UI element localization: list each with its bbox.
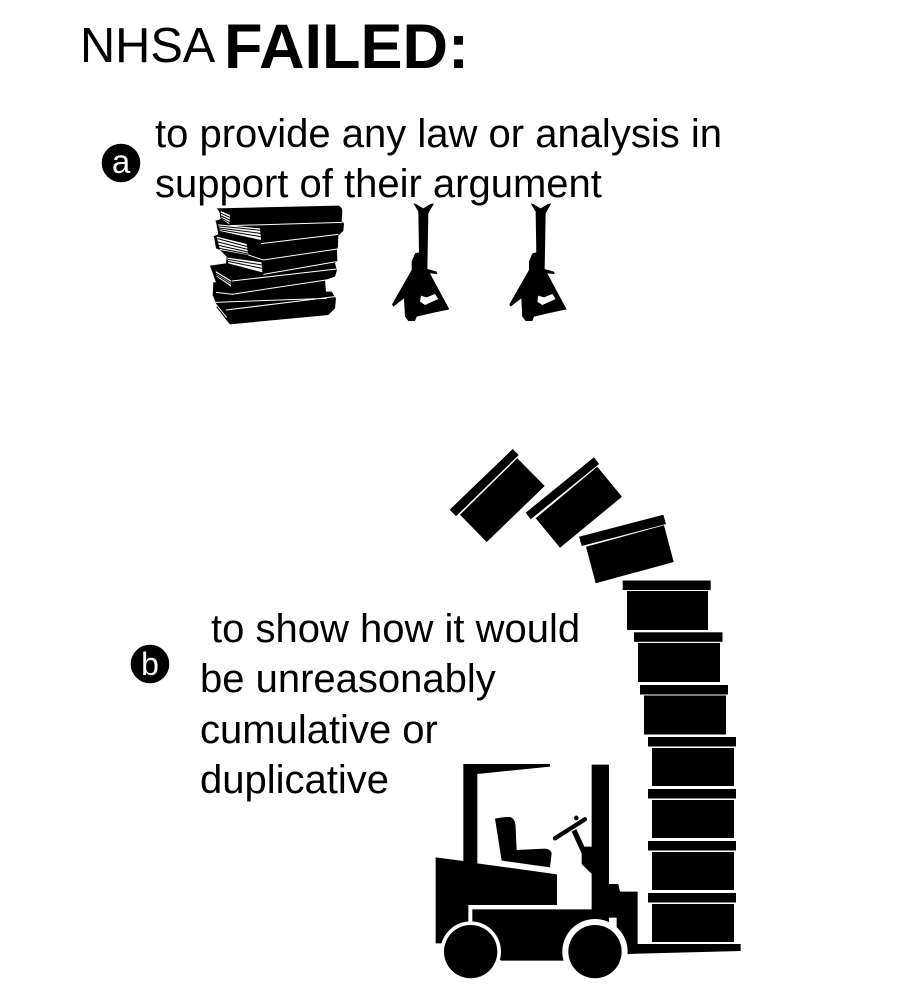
point a text: support of their argument: [155, 162, 602, 206]
point a text: to provide any law or analysis in: [155, 112, 722, 156]
title: NHSA: [80, 19, 216, 73]
point b text: be unreasonably: [200, 657, 496, 701]
icon: forklift: [436, 764, 741, 984]
point b text: duplicative: [200, 758, 389, 802]
point b badge: [131, 645, 169, 683]
stacked boxes: [623, 580, 736, 942]
falling boxes: [450, 449, 674, 583]
icon: jack stand left: [392, 203, 449, 321]
point b badge: b: [141, 646, 159, 682]
title: [80, 12, 469, 82]
icon: jack stand right: [509, 203, 567, 321]
point a badge: [102, 143, 140, 182]
title: FAILED:: [224, 12, 469, 82]
point a text: [155, 112, 722, 206]
icon: books stack: [210, 206, 344, 324]
point b text: to show how it would: [211, 607, 580, 651]
point b text: cumulative or: [200, 708, 438, 752]
point b text: [200, 607, 580, 802]
point a badge: a: [112, 143, 131, 180]
